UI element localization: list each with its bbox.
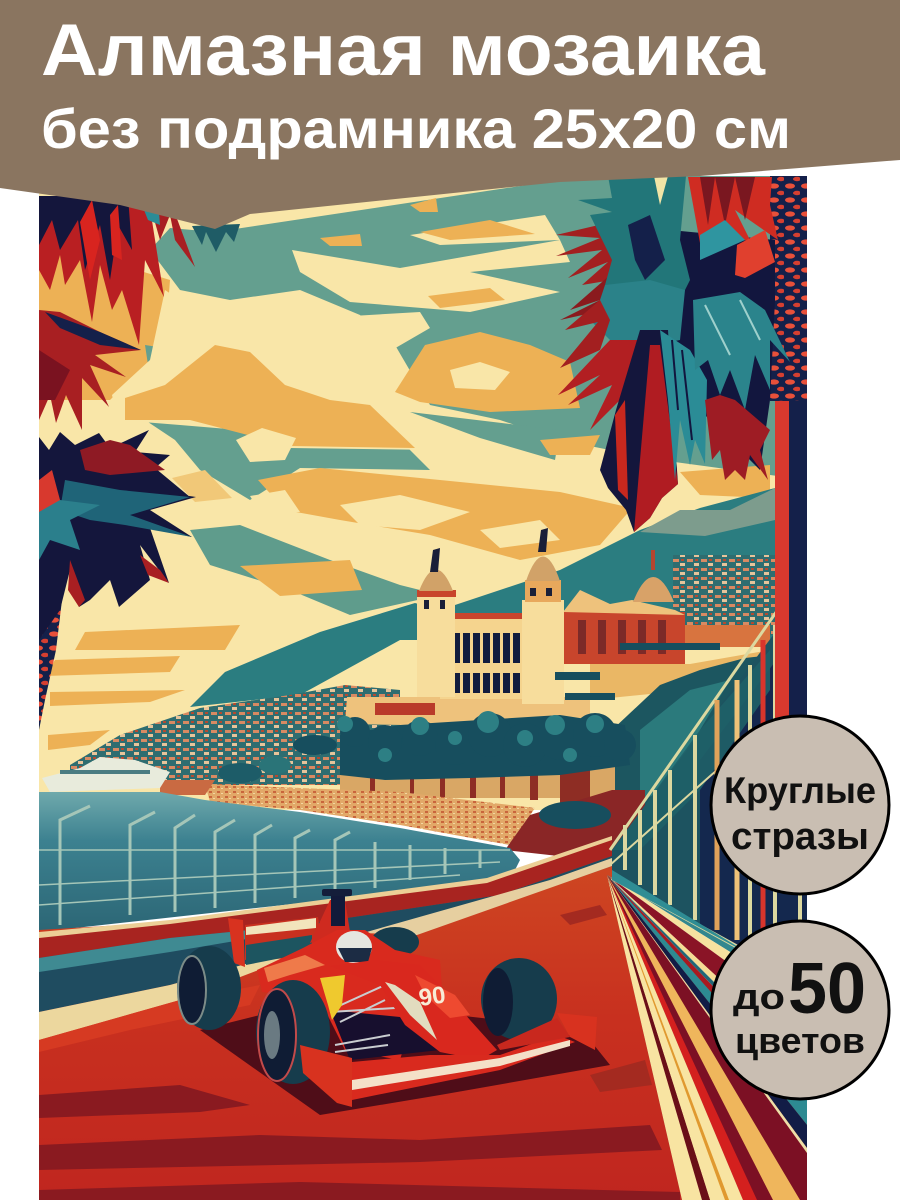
barrier teal band [39, 856, 612, 1012]
right tower [522, 528, 564, 704]
badge: up to 50 colours [711, 921, 889, 1099]
teal frond middle [580, 280, 685, 360]
clouds [45, 290, 770, 750]
badge: up to 50 colours: до [733, 976, 785, 1017]
road edge line [39, 958, 290, 1040]
palace [345, 528, 770, 728]
car shadow [200, 1016, 610, 1115]
badge: up to 50 colours: 50 [788, 949, 866, 1029]
base terrace [345, 697, 590, 728]
rear wing [228, 917, 322, 967]
teal frond right [693, 292, 790, 410]
right wing [560, 550, 770, 700]
upper left palm [39, 196, 240, 430]
track stripes [607, 875, 807, 1200]
sky [39, 170, 807, 810]
red fringe under right frond [705, 395, 770, 480]
lower left palm [39, 430, 196, 730]
wooded hillside on the right [615, 656, 757, 806]
front right wheel [481, 958, 557, 1040]
badge: round rhinestones [711, 716, 889, 894]
right palm [556, 176, 807, 736]
race car [177, 889, 610, 1115]
main facade [440, 617, 524, 699]
road shadows [39, 1085, 662, 1170]
left tower [417, 548, 456, 697]
mountains [70, 488, 775, 785]
fence by the sea [39, 806, 510, 925]
rear right wheel [373, 927, 419, 954]
shore foliage block [506, 790, 645, 856]
driver helmet [336, 931, 372, 963]
side frond [150, 200, 195, 267]
engine cover and sidepod [257, 930, 442, 1060]
title banner [0, 0, 900, 229]
car number: 90 [417, 981, 447, 1012]
teal frond top [578, 176, 690, 335]
front wing [300, 1013, 597, 1107]
fronds [39, 430, 196, 640]
badge: round rhinestones: Круглые [724, 770, 876, 811]
trunk [770, 176, 807, 736]
badge: up to 50 colours: цветов [735, 1020, 865, 1061]
badge: round rhinestones: стразы [731, 816, 869, 858]
front left wheel [256, 980, 330, 1084]
air intake [310, 900, 350, 943]
red frond left [556, 220, 635, 285]
hanging dark and red frond [600, 330, 678, 532]
yacht [42, 757, 170, 792]
title line 1: Алмазная мозаика [41, 10, 767, 91]
red fringe left [558, 340, 640, 430]
second red frond [39, 310, 141, 430]
barrier red band [39, 838, 612, 958]
dark frond core [610, 230, 775, 470]
trunk [39, 600, 62, 730]
road [39, 836, 807, 1200]
main red frond [39, 196, 164, 345]
rear left wheel [177, 946, 241, 1030]
hanging teal frond [660, 330, 707, 480]
promenade trees [160, 643, 772, 862]
right fence [608, 611, 807, 948]
sea wall [205, 784, 535, 845]
sea [39, 792, 520, 932]
nose [352, 960, 497, 1055]
red frond top [688, 177, 778, 243]
dense canopy [340, 715, 630, 780]
poster artwork [39, 170, 807, 1200]
title line 2: без подрамника 25х20 см [41, 97, 791, 160]
floor and suspension [330, 1010, 440, 1060]
